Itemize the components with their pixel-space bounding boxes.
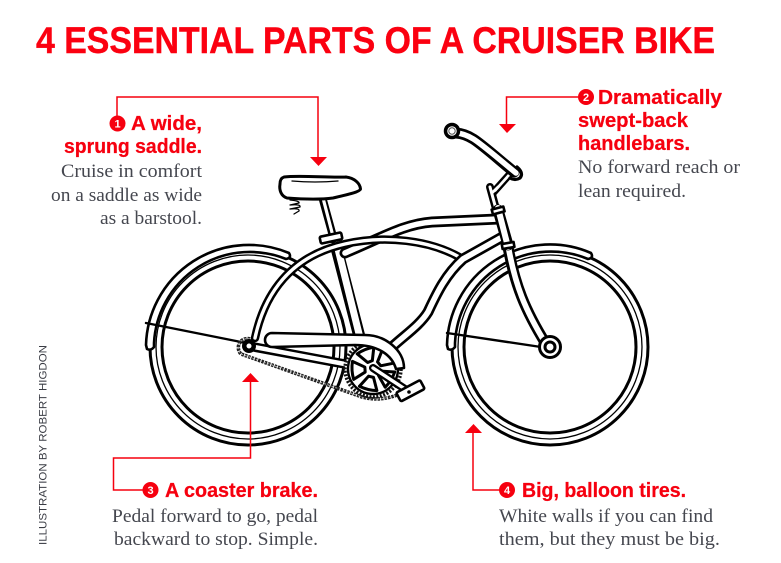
callout 1: saddle (51, 97, 327, 229)
front fender (447, 244, 592, 350)
callout 3: coaster brake (112, 373, 318, 550)
callout 4 body (499, 506, 720, 550)
arrowhead (499, 124, 516, 133)
chainstay (254, 347, 350, 365)
crank and pedal (373, 368, 425, 402)
callout 2 heading: handlebars. (578, 133, 690, 155)
callout 1 body: Cruise in comfort (61, 161, 203, 182)
callout 2 heading (578, 87, 723, 155)
seat tube and seat post (323, 198, 366, 362)
seat clamp (320, 232, 342, 244)
callout 3 body: Pedal forward to go, pedal (112, 506, 318, 527)
front wheel (452, 249, 648, 445)
illustration credit: ILLUSTRATION BY ROBERT HIGDON (38, 345, 50, 545)
number badge 4: 4 (504, 485, 511, 497)
callout 2 body (578, 157, 741, 202)
callout 3 heading: A coaster brake. (165, 480, 318, 502)
callout 4 body: them, but they must be big. (499, 529, 720, 550)
rear fender (146, 245, 290, 350)
leader line to saddle (117, 97, 318, 158)
callout 2 heading: Dramatically (598, 87, 723, 109)
handlebar (446, 124, 521, 180)
callout 1 heading: sprung saddle. (64, 136, 202, 158)
number badge 2 (578, 89, 594, 105)
callout 1 body: on a saddle as wide (51, 185, 202, 206)
callout 2 body: No forward reach or (578, 157, 741, 178)
down tube (392, 236, 504, 347)
title: 4 ESSENTIAL PARTS OF A CRUISER BIKE (36, 20, 715, 61)
chain (238, 339, 400, 399)
callout 2: handlebars (499, 87, 741, 202)
number badge 3 (142, 482, 158, 498)
leader line to tires (473, 432, 500, 490)
saddle (280, 176, 360, 214)
number badge 2: 2 (583, 92, 589, 104)
callout 4 heading: Big, balloon tires. (522, 480, 686, 502)
bicycle illustration (146, 124, 648, 445)
callout 3 body (112, 506, 318, 550)
chainring (345, 341, 401, 397)
callout 1 heading (64, 113, 202, 158)
fender struts (146, 323, 541, 347)
callout 2 body: lean required. (578, 181, 686, 202)
cantilever tube (255, 240, 461, 338)
arrowhead (242, 373, 259, 382)
number badge 1: 1 (114, 118, 121, 130)
number badge 4 (499, 482, 515, 498)
callout 4: balloon tires (465, 424, 720, 550)
top tube (345, 219, 498, 253)
callout 3 body: backward to stop. Simple. (114, 529, 318, 550)
arrowhead (465, 424, 482, 433)
leader line to brake (114, 381, 250, 490)
callout 1 body: as a barstool. (100, 208, 202, 229)
arrowhead (310, 157, 327, 166)
head tube (492, 207, 514, 249)
callout 1 heading: A wide, (131, 113, 202, 135)
handlebar stem (490, 175, 509, 209)
front fork (508, 245, 546, 344)
callout 4 body: White walls if you can find (499, 506, 714, 527)
callout 2 heading: swept-back (578, 110, 689, 132)
chain guard (265, 333, 404, 369)
number badge 3: 3 (147, 485, 154, 497)
front hub (540, 336, 560, 358)
leader line to handlebars (506, 97, 578, 125)
number badge 1 (110, 116, 126, 132)
rear wheel (150, 249, 346, 445)
rear hub (242, 339, 256, 353)
callout 1 body (51, 161, 203, 229)
